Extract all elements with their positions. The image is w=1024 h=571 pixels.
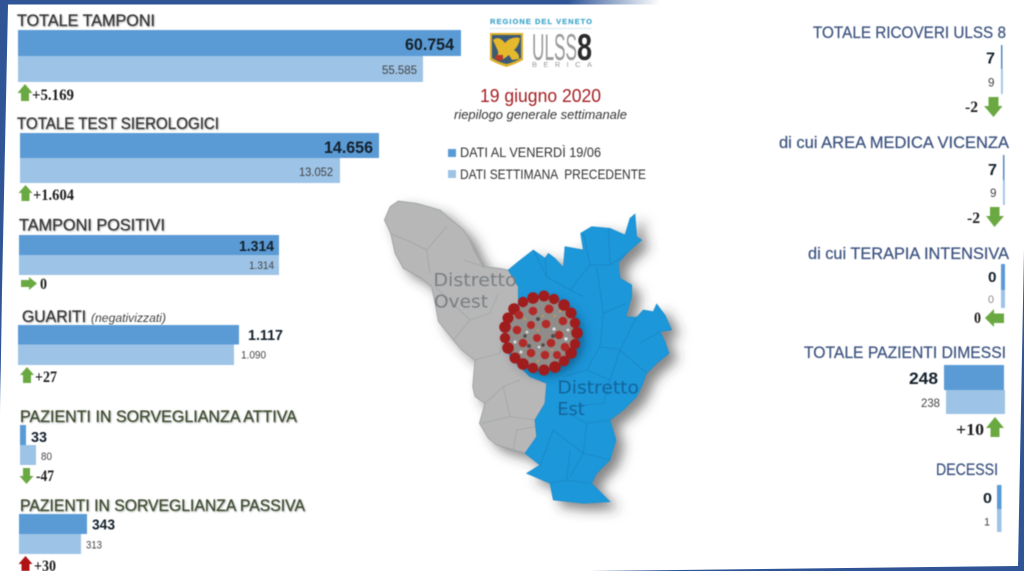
- map regions with shadow: [384, 201, 672, 503]
- heading: sorveglianza passiva: PAZIENTI IN SORVEGLIANZA PASSIVA: [20, 496, 306, 515]
- value: previous test: 13.052: [299, 165, 333, 179]
- delta: positivi: 0: [40, 276, 47, 293]
- heading: pazienti dimessi: TOTALE PAZIENTI DIMESSI: [804, 343, 1006, 362]
- value: current passiva: 343: [92, 516, 115, 534]
- bar: previous terapia: [1001, 290, 1005, 308]
- bar: current terapia: [1001, 264, 1005, 290]
- bar: current guariti: [18, 325, 239, 344]
- map: ulss 8 districts: [384, 201, 672, 503]
- subtitle: riepilogo generale settimanale: [454, 107, 627, 122]
- bar: previous attiva: [20, 445, 36, 465]
- logo text: berica: BERICA: [532, 60, 592, 69]
- bar: previous passiva: [19, 534, 81, 554]
- panel: decessi: [936, 460, 1002, 532]
- heading: guariti: GUARITI: [22, 307, 86, 326]
- delta: ricoveri: -2: [965, 99, 978, 116]
- panel: terapia intensiva: [808, 244, 1010, 327]
- heading: test sierologici: TOTALE TEST SIEROLOGICI: [17, 114, 219, 133]
- legend label: current: DATI AL VENERDÌ 19/06: [460, 144, 601, 160]
- icon: arrow down: [984, 97, 1002, 117]
- panel: sorveglianza passiva: [18, 496, 306, 571]
- heading: area medica: di cui AREA MEDICA VICENZA: [779, 133, 1010, 152]
- icon: arrow up: [986, 417, 1004, 437]
- icon: arrow up: [20, 367, 34, 383]
- map region: distretto est: [503, 214, 672, 503]
- map region: distretto ovest: [384, 201, 547, 453]
- delta: attiva: -47: [36, 468, 54, 485]
- bar: current dimessi: [944, 365, 1004, 390]
- value: previous attiva: 80: [41, 451, 52, 463]
- legend label: previous: DATI SETTIMANA PRECEDENTE: [460, 166, 646, 182]
- bar: previous ricoveri: [1001, 69, 1003, 94]
- logo: regione del veneto ulss8: [490, 17, 592, 69]
- value: current ricoveri: 7: [986, 50, 995, 68]
- legend swatch: previous: [448, 170, 456, 178]
- value: previous area medica: 9: [990, 186, 997, 200]
- bar: current area medica: [1003, 155, 1004, 180]
- value: previous tamponi: 55.585: [382, 63, 417, 77]
- bar: current passiva: [19, 514, 87, 534]
- legend: [448, 144, 646, 182]
- icon: lion shield: [490, 33, 523, 67]
- legend swatch: current: [448, 149, 456, 157]
- value: current tamponi: 60.754: [405, 35, 455, 54]
- bar: current decessi: [997, 485, 1002, 509]
- heading: totale tamponi: TOTALE TAMPONI: [17, 11, 155, 30]
- bar: current ricoveri: [1001, 45, 1002, 69]
- panel: totale ricoveri: [813, 23, 1006, 117]
- icon: arrow down: [20, 468, 34, 484]
- map: municipal borders east: [533, 228, 660, 483]
- icon: arrow left: [985, 309, 1004, 327]
- icon: arrow up: [18, 84, 32, 101]
- value: current test: 14.656: [324, 138, 373, 157]
- bar: previous decessi: [997, 509, 1002, 532]
- icon: red arrow up: [18, 556, 32, 571]
- bar: previous test: [20, 158, 340, 183]
- value: current attiva: 33: [31, 429, 47, 446]
- map label: distretto est: Distretto: [557, 378, 639, 398]
- panel: sorveglianza attiva: [20, 407, 298, 485]
- value: previous positivi: 1.314: [249, 260, 274, 272]
- value: current decessi: 0: [983, 490, 992, 507]
- value: current dimessi: 248: [909, 369, 938, 388]
- bar: previous area medica: [1003, 180, 1005, 205]
- panel: area medica vicenza: [779, 133, 1010, 227]
- map label: ovest: Ovest: [434, 292, 488, 312]
- map label: distretto ovest: Distretto: [433, 271, 517, 291]
- bar: current attiva: [20, 425, 26, 445]
- value: current area medica: 7: [988, 162, 997, 179]
- icon: arrow down: [986, 207, 1004, 227]
- value: previous terapia: 0: [988, 294, 994, 306]
- value: previous ricoveri: 9: [988, 76, 995, 90]
- icon: arrow right: [21, 277, 37, 290]
- panel: totale test sierologici: [17, 114, 379, 204]
- value: previous guariti: 1.090: [241, 350, 266, 362]
- panel: pazienti dimessi: [804, 343, 1006, 439]
- value: current terapia: 0: [988, 269, 996, 286]
- delta: guariti: +27: [35, 369, 57, 386]
- heading: tamponi positivi: TAMPONI POSITIVI: [19, 216, 165, 234]
- panel: tamponi positivi: [19, 216, 279, 293]
- bar: current test: [20, 133, 379, 158]
- delta: area medica: -2: [967, 210, 980, 227]
- delta: tamponi: +5.169: [32, 87, 74, 104]
- panel: guariti: [18, 307, 283, 386]
- map label: est: Est: [557, 400, 585, 420]
- value: previous dimessi: 238: [921, 396, 940, 410]
- icon: coronavirus: [499, 290, 583, 376]
- value: previous passiva: 313: [86, 540, 102, 552]
- logo text: 8: 8: [577, 27, 592, 68]
- icon: arrow up: [18, 185, 32, 201]
- heading: decessi: DECESSI: [936, 460, 998, 479]
- bar: current tamponi: [18, 30, 461, 56]
- delta: terapia: 0: [974, 310, 981, 327]
- bar: previous tamponi: [18, 56, 423, 82]
- bar: previous dimessi: [946, 390, 1005, 414]
- delta: test: +1.604: [33, 187, 74, 204]
- logo: regione del veneto ulss8: ULSS: [532, 27, 577, 68]
- date: 19 giugno 2020: [480, 85, 601, 106]
- logo text: regione del veneto: REGIONE DEL VENETO: [490, 17, 592, 26]
- value: current positivi: 1.314: [239, 238, 275, 255]
- bar: previous positivi: [19, 255, 279, 275]
- map: municipal borders west: [390, 227, 535, 450]
- note: negativizzati: (negativizzati): [91, 313, 166, 325]
- heading: terapia intensiva: di cui TERAPIA INTENSIVA: [808, 244, 1010, 263]
- bar: previous guariti: [18, 344, 234, 365]
- panel: totale tamponi: [17, 11, 461, 104]
- value: current guariti: 1.117: [248, 327, 283, 344]
- heading: totale ricoveri: TOTALE RICOVERI ULSS 8: [813, 23, 1006, 42]
- heading: sorveglianza attiva: PAZIENTI IN SORVEGLIANZA ATTIVA: [20, 407, 298, 426]
- value: previous decessi: 1: [984, 516, 990, 528]
- bar: current positivi: [19, 235, 279, 255]
- delta: dimessi: +10: [956, 420, 984, 439]
